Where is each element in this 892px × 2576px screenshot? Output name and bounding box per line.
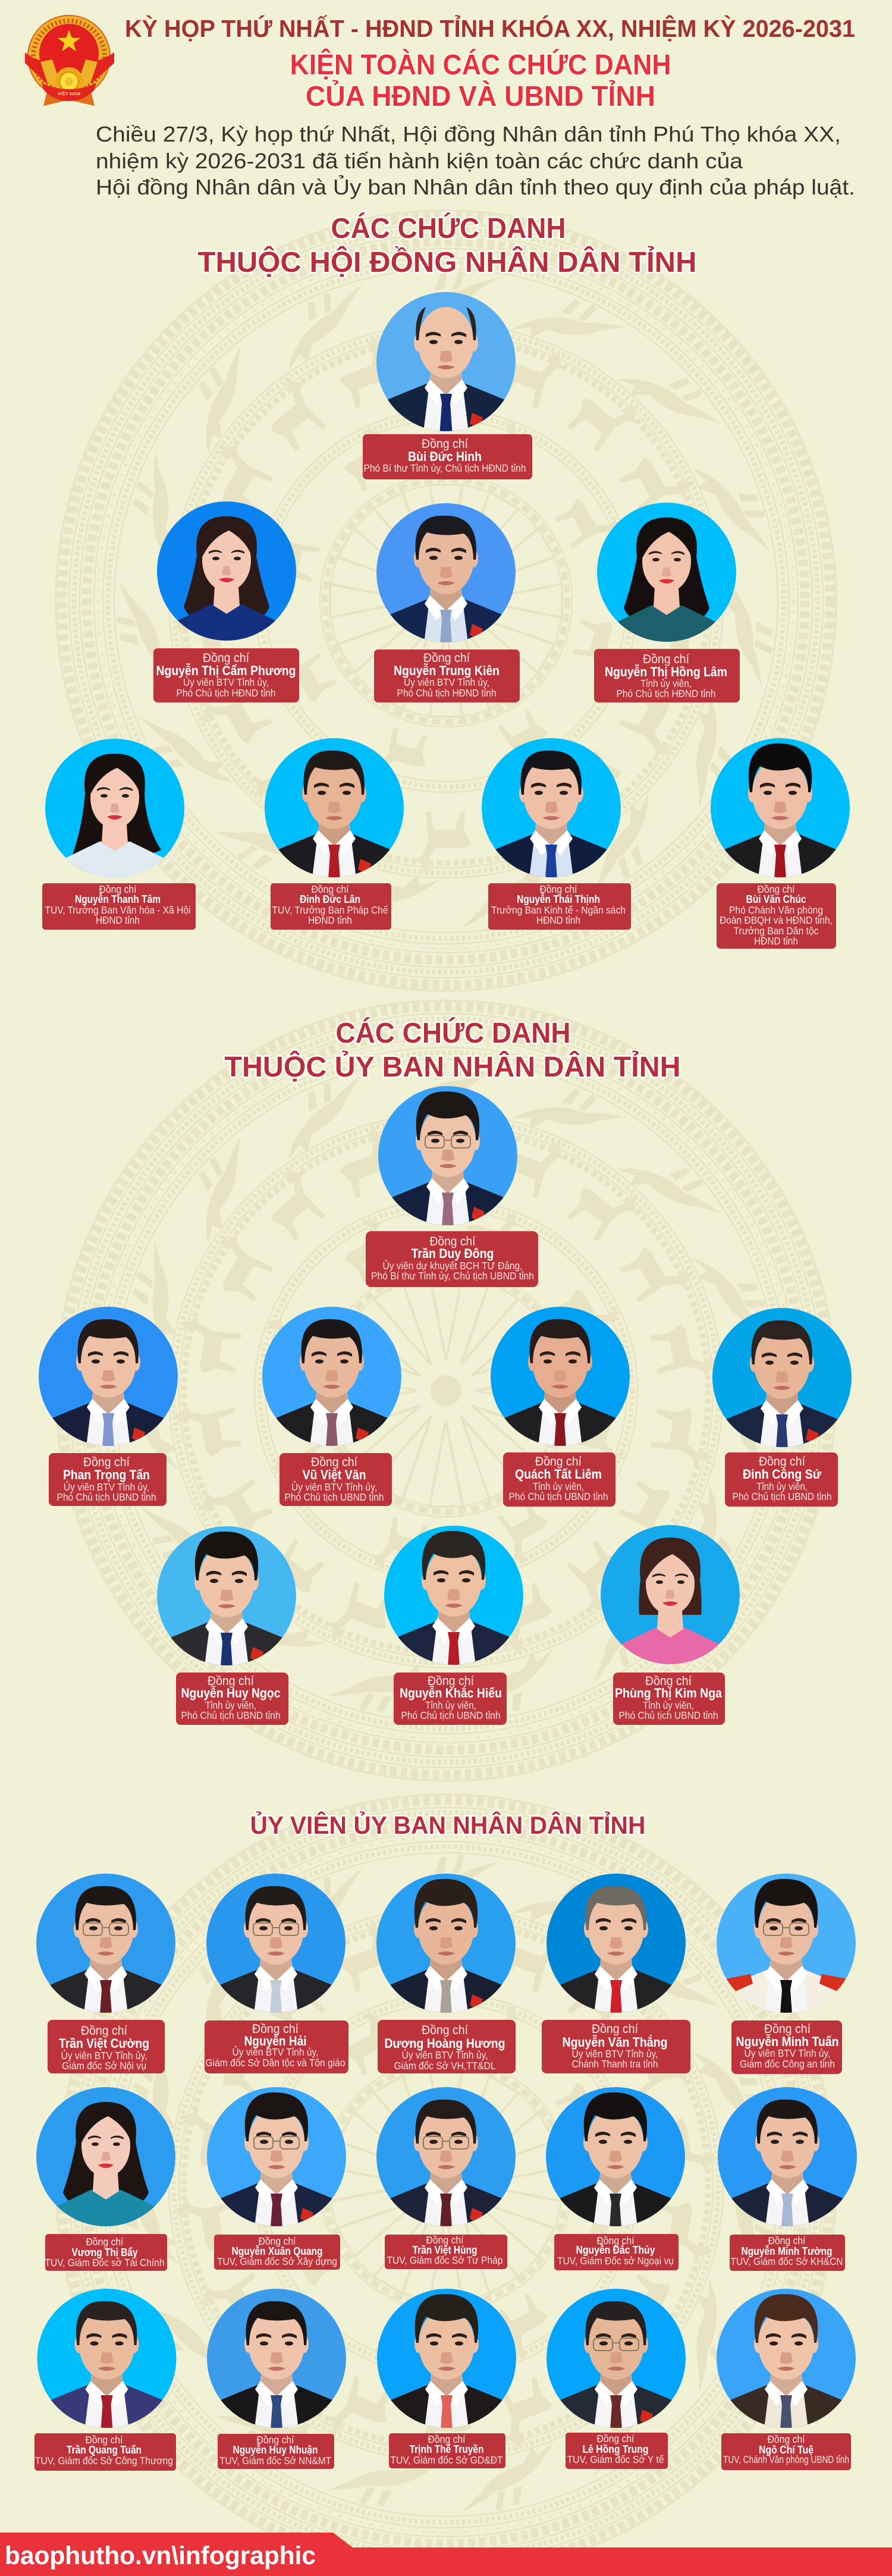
person: Nguyễn Huy Ngọc [143, 1526, 310, 1725]
label [48, 2020, 165, 2073]
person: Nguyễn Thái Thịnh [468, 738, 635, 930]
portrait [143, 1526, 310, 1700]
label [363, 434, 532, 479]
portrait [532, 2087, 699, 2261]
person: Nguyễn Hải [193, 1874, 359, 2073]
label: Đồng chí [252, 2022, 299, 2036]
person: Quách Tất Liêm [477, 1307, 643, 1507]
label: HĐND tỉnh [536, 914, 580, 926]
portrait [363, 1874, 529, 2047]
label: Bùi Đức Hinh [408, 449, 482, 464]
label: Đồng chí [422, 437, 468, 451]
portrait [25, 1307, 191, 1480]
label: Trưởng Ban Dân tộc [734, 925, 819, 937]
label: Phó Chủ tịch HĐND tỉnh [616, 688, 716, 699]
label: Nguyễn Minh Tuấn [736, 2034, 838, 2049]
label: Trịnh Thế Truyền [409, 2443, 484, 2455]
label: Giám đốc Công an tỉnh [740, 2058, 835, 2070]
heading: session line: KỲ HỌP THỨ NHẤT - HĐND TỈNH KHÓA XX, NHIỆM KỲ 2026-2031 [125, 15, 855, 42]
footer credit: baophutho.vn\infographic [5, 2542, 316, 2570]
label: Đồng chí [645, 1674, 692, 1688]
label: Đồng chí [540, 883, 577, 895]
person: Dương Hoàng Hương [363, 1874, 529, 2073]
label: Nguyễn Thị Hồng Lâm [605, 664, 727, 679]
portrait [23, 1874, 189, 2047]
portrait [370, 1526, 537, 1699]
portrait [699, 1308, 865, 1482]
label [394, 1673, 507, 1725]
label: Đồng chí [592, 2022, 638, 2036]
label [389, 2433, 505, 2468]
label: TUV, Giám Đốc sở Tài Chính [45, 2257, 164, 2268]
portrait [251, 738, 417, 912]
label: TUV, Chánh Văn phòng UBND tỉnh [723, 2453, 849, 2465]
label: Vũ Việt Văn [302, 1467, 366, 1482]
intro paragraph: Chiều 27/3, Kỳ họp thứ Nhất, Hội đồng Nhân dân tỉnh Phú Thọ khóa XX, [96, 122, 841, 146]
label [374, 650, 520, 702]
person: Đinh Đức Lân [251, 738, 417, 930]
label [214, 2235, 340, 2270]
label: TUV, Trưởng Ban Văn hóa - Xã Hội [45, 904, 190, 916]
label: Đồng chí [83, 1455, 130, 1469]
label: TUV, Giám đốc Sở Công Thương [35, 2455, 173, 2467]
label [725, 1452, 838, 1507]
label: Tỉnh ủy viên, [205, 1699, 256, 1711]
person: Trịnh Thế Truyền [363, 2289, 530, 2468]
label [594, 649, 740, 702]
label [503, 1452, 615, 1507]
label: Đồng chí [208, 1674, 254, 1688]
label [721, 2433, 851, 2470]
intro paragraph: Hội đồng Nhân dân và Ủy ban Nhân dân tỉnh theo quy định của pháp luật. [96, 174, 855, 199]
label [731, 2020, 842, 2074]
person: Phan Trọng Tấn [25, 1307, 191, 1506]
portrait [703, 1874, 869, 2047]
person: Nguyễn Minh Tuấn [703, 1874, 869, 2074]
label: Lê Hồng Trung [583, 2443, 648, 2455]
label: Phó Chủ tịch HĐND tỉnh [397, 687, 496, 699]
label: Vương Thị Bẩy [71, 2246, 138, 2258]
label: Nguyễn Khắc Hiếu [400, 1686, 502, 1700]
label: Phan Trọng Tấn [63, 1467, 150, 1482]
portrait [477, 1307, 643, 1480]
label: Bùi Văn Chúc [746, 893, 806, 905]
label [613, 1673, 725, 1725]
heading: UBND section: CÁC CHỨC DANH [335, 1016, 571, 1049]
label: Phó Chánh Văn phòng [729, 904, 823, 916]
portrait [193, 2087, 360, 2261]
label: Giám đốc Sở VH,TT&DL [394, 2060, 496, 2072]
label [385, 2234, 507, 2269]
bronze drum pattern: section 1 [56, 211, 836, 991]
label [153, 648, 299, 702]
portrait [23, 2087, 189, 2261]
label: Quách Tất Liêm [515, 1467, 602, 1482]
label: Đồng chí [759, 1455, 805, 1469]
label: Đồng chí [428, 2433, 466, 2445]
person: Nguyễn Minh Tường [704, 2087, 871, 2271]
label [542, 2020, 690, 2073]
label: Đồng chí [203, 651, 249, 665]
person: Trần Duy Đông [365, 1086, 538, 1287]
label: Ủy viên BTV Tỉnh ủy, [402, 2048, 488, 2061]
label: Phó Chủ tịch HĐND tỉnh [176, 687, 276, 699]
label: Trần Duy Đông [412, 1246, 494, 1261]
person: Bùi Văn Chúc [697, 738, 863, 949]
label: Nguyễn Văn Thắng [563, 2035, 667, 2050]
intro paragraph [96, 122, 855, 199]
label: TUV, Giám đốc Sở Tư Pháp [387, 2254, 503, 2266]
label: Phó Bí thư Tỉnh ủy, Chủ tịch HĐND tỉnh [364, 462, 526, 474]
person: Nguyễn Thị Hồng Lâm [594, 503, 740, 702]
person: Trần Việt Cường [23, 1874, 189, 2073]
portrait [249, 1307, 415, 1480]
label: Đinh Công Sứ [743, 1467, 822, 1482]
label: Đồng chí [597, 2235, 635, 2246]
label: Nguyễn Đắc Thủy [576, 2244, 655, 2256]
label: Nguyễn Thái Thịnh [517, 893, 600, 905]
label: Giám đốc Sở Nội vụ [62, 2060, 146, 2072]
label [366, 1231, 538, 1287]
panel: HĐND people [32, 292, 863, 949]
label [717, 883, 836, 949]
label: Trần Việt Cường [59, 2036, 149, 2051]
heading: UBND section [225, 1016, 680, 1083]
label: Nguyễn Huy Ngọc [181, 1686, 281, 1700]
label: Phó Bí thư Tỉnh ủy, Chủ tịch UBND tỉnh [371, 1270, 534, 1282]
label: Nguyễn Trung Kiên [394, 663, 500, 678]
bronze drum pattern: section 2 [56, 1000, 836, 1781]
label: Đồng chí [422, 2023, 468, 2037]
label: Phó Chủ tịch UBND tỉnh [401, 1709, 501, 1721]
label: Đồng chí [643, 652, 689, 666]
portrait [363, 2087, 529, 2261]
footer bar [0, 2533, 892, 2576]
label: Phó Chủ tịch UBND tỉnh [57, 1491, 156, 1503]
label [271, 883, 391, 930]
person: Nguyễn Thanh Tâm [32, 739, 198, 930]
label: Đồng chí [426, 2234, 464, 2246]
label: HĐND tỉnh [308, 914, 352, 926]
label: HĐND tỉnh [96, 914, 140, 926]
label: Ủy viên BTV Tỉnh ủy, [61, 2049, 147, 2062]
label: Ủy viên BTV Tỉnh ủy, [232, 2045, 319, 2058]
person: Vương Thị Bẩy [23, 2087, 189, 2271]
label: Đồng chí [81, 2024, 127, 2038]
intro paragraph: nhiệm kỳ 2026-2031 đã tiến hành kiện toàn các chức danh của [96, 149, 743, 173]
label: TUV, Giám đốc Sở GD&ĐT [390, 2454, 503, 2466]
person: Đinh Công Sứ [699, 1308, 865, 1507]
label: Đồng chí [257, 2434, 294, 2446]
label [45, 2234, 167, 2271]
person: Nguyễn Đắc Thủy [532, 2087, 699, 2270]
label: TUV, Trưởng Ban Pháp Chế [272, 904, 388, 916]
label: Giám đốc Sở Dân tộc và Tôn giáo [206, 2057, 345, 2069]
label [566, 2433, 668, 2469]
label: Đồng chí [258, 2235, 296, 2247]
label: TUV, Giám đốc Sở Y tế [567, 2453, 664, 2465]
label: Trưởng Ban Kinh tế - Ngân sách [491, 904, 626, 916]
label: TUV, Giám đốc Sở NN&MT [219, 2455, 331, 2467]
portrait [597, 503, 736, 642]
label: Phó Chủ tịch UBND tỉnh [618, 1709, 718, 1721]
label: Đồng chí [423, 651, 470, 665]
label: Nguyễn Thị Cẩm Phương [156, 663, 296, 678]
label: Trần Quang Tuấn [67, 2443, 142, 2456]
label: Phó Chủ tịch UBND tỉnh [733, 1491, 831, 1502]
heading: HĐND section [197, 212, 697, 278]
person: Nguyễn Huy Nhuận [193, 2289, 360, 2469]
portrait [363, 2289, 530, 2462]
label: Ủy viên BTV Tỉnh ủy, [572, 2047, 658, 2060]
icon: national emblem [25, 15, 114, 106]
bronze drum pattern: section 3 [56, 1794, 836, 2575]
label [49, 1453, 167, 1506]
label: TUV, Giám đốc Sở Xây dựng [217, 2255, 337, 2267]
label [205, 2020, 348, 2073]
label [554, 2234, 679, 2270]
title: CỦA HĐND VÀ UBND TỈNH [306, 80, 655, 112]
portrait [697, 738, 863, 912]
label: Đồng chí [99, 883, 137, 895]
portrait [533, 1874, 699, 2047]
portrait [365, 1086, 531, 1260]
portrait [157, 501, 296, 641]
portrait [703, 2289, 869, 2462]
panel: UBND people [25, 1086, 865, 1725]
label: Phó Chủ tịch UBND tỉnh [181, 1709, 281, 1721]
label: Nguyễn Huy Nhuận [233, 2443, 318, 2456]
label: Chánh Thanh tra tỉnh [572, 2058, 658, 2070]
label: Nguyễn Thanh Tâm [75, 893, 161, 905]
portrait [704, 2087, 871, 2261]
label: TUV, Giám Đốc sở Ngoại vụ [557, 2255, 674, 2267]
label: Đồng chí [312, 883, 349, 895]
person: Nguyễn Thị Cẩm Phương [153, 501, 299, 702]
label: Ủy viên BTV Tỉnh ủy, [291, 1480, 377, 1493]
label [279, 1453, 392, 1506]
person: Phùng Thị Kim Nga [587, 1525, 753, 1725]
label: Đoàn ĐBQH và HĐND tỉnh, [720, 914, 833, 926]
portrait [193, 1874, 359, 2047]
label: Đồng chí [758, 883, 795, 895]
label: Ủy viên BTV Tỉnh ủy, [404, 676, 489, 688]
label: Nguyễn Minh Tường [741, 2245, 833, 2257]
label [378, 2020, 516, 2073]
title [290, 48, 671, 112]
label: Dương Hoàng Hương [384, 2036, 505, 2051]
label [34, 2433, 176, 2471]
label [42, 883, 196, 930]
label: Đồng chí [86, 2434, 123, 2446]
label: Tỉnh ủy viên, [425, 1699, 476, 1711]
portrait [376, 503, 516, 642]
label: Phó Chủ tịch UBND tỉnh [284, 1491, 384, 1503]
portrait [376, 292, 516, 431]
heading: UBND section: THUỘC ỦY BAN NHÂN DÂN TỈNH [225, 1050, 680, 1083]
heading: HĐND section: THUỘC HỘI ĐỒNG NHÂN DÂN TỈNH [197, 246, 697, 278]
label: Phùng Thị Kim Nga [615, 1686, 722, 1700]
label: Đồng chí [768, 2235, 806, 2246]
label: Ủy viên BTV Tỉnh ủy, [183, 676, 269, 688]
person: Nguyễn Xuân Quang [193, 2087, 360, 2270]
person: Bùi Đức Hinh [363, 292, 532, 479]
label: HĐND tỉnh [754, 935, 798, 947]
panel: UBND members [23, 1874, 871, 2471]
person: Nguyễn Khắc Hiếu [370, 1526, 537, 1725]
person: Nguyễn Trung Kiên [374, 503, 520, 702]
label: Ủy viên dự khuyết BCH TƯ Đảng, [383, 1259, 522, 1272]
label: Ngô Chí Tuệ [759, 2443, 814, 2456]
portrait [24, 2289, 190, 2462]
label: Đồng chí [311, 1455, 357, 1469]
label: Ủy viên BTV Tỉnh ủy, [745, 2047, 830, 2059]
person: Trần Việt Hùng [363, 2087, 529, 2269]
label: Tỉnh ủy viên, [533, 1480, 584, 1492]
title: KIỆN TOÀN CÁC CHỨC DANH [290, 48, 671, 81]
label: Ủy viên BTV Tỉnh ủy, [64, 1480, 149, 1493]
label: Đồng chí [597, 2433, 635, 2445]
portrait [193, 2289, 360, 2462]
label: Đồng chí [767, 2433, 805, 2445]
label: Tỉnh ủy viên, [643, 1699, 694, 1711]
person: Nguyễn Văn Thắng [533, 1874, 699, 2073]
portrait [587, 1525, 753, 1699]
label [730, 2235, 845, 2271]
label: Đồng chí [535, 1455, 582, 1469]
label: TUV, Giám đốc Sở KH&CN [730, 2255, 843, 2267]
label: Nguyễn Hải [244, 2034, 307, 2048]
portrait [468, 738, 635, 912]
label: Tỉnh ủy viên, [756, 1480, 808, 1492]
label: Trần Việt Hùng [413, 2244, 477, 2256]
heading: HĐND section: CÁC CHỨC DANH [331, 212, 566, 244]
label [488, 883, 631, 930]
label: Đồng chí [86, 2236, 124, 2248]
icon: national emblem: VIỆT NAM [58, 91, 80, 96]
person: Ngô Chí Tuệ [703, 2289, 869, 2470]
label: Đinh Đức Lân [300, 893, 360, 905]
label: Đồng chí [764, 2022, 811, 2036]
label: Đồng chí [428, 1674, 474, 1688]
portrait [533, 2289, 699, 2462]
label: Đồng chí [429, 1235, 476, 1248]
label: Phó Chủ tịch UBND tỉnh [509, 1491, 608, 1502]
person: Trần Quang Tuấn [24, 2289, 190, 2471]
portrait [45, 739, 184, 878]
label [218, 2434, 334, 2469]
person: Vũ Việt Văn [249, 1307, 415, 1506]
person: Lê Hồng Trung [533, 2289, 699, 2469]
label: Nguyễn Xuân Quang [232, 2245, 322, 2257]
label: Tỉnh ủy viên, [640, 677, 692, 689]
label [176, 1673, 288, 1725]
heading: UBND members: ỦY VIÊN ỦY BAN NHÂN DÂN TỈNH [250, 1811, 646, 1839]
